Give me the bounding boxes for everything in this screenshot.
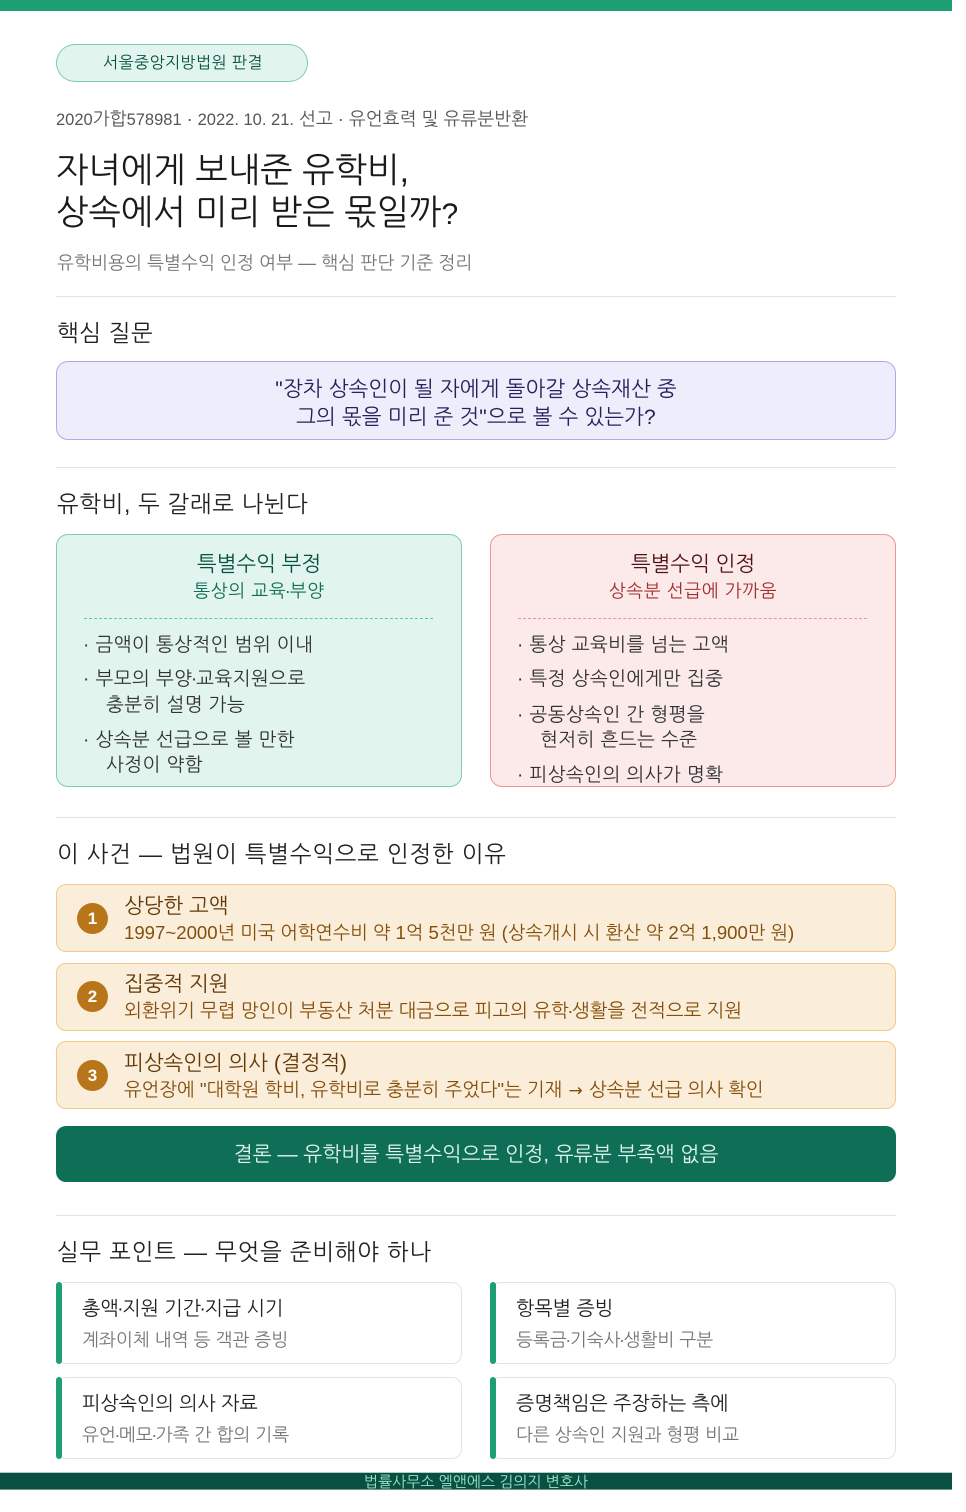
point title: 증명책임은 주장하는 측에 — [516, 1393, 728, 1415]
case meta: 2020가합578981 · 2022. 10. 21. 선고 · 유언효력 및 유류분반환 — [56, 109, 528, 129]
reason 2 — [56, 963, 896, 1031]
reason 3 — [56, 1041, 896, 1109]
number badge: 2 — [88, 987, 97, 1006]
criteria list — [517, 635, 729, 786]
number badge — [77, 981, 108, 1012]
point card 4 — [490, 1377, 896, 1459]
conclusion banner — [56, 1126, 896, 1182]
panel subheading: 상속분 선급에 가까움 — [609, 581, 777, 601]
top bar — [0, 0, 952, 11]
footer — [0, 1472, 952, 1490]
heading: core question: 핵심 질문 — [57, 320, 153, 346]
panel heading: 특별수익 부정 — [197, 553, 321, 576]
reason title: 집중적 지원 — [124, 973, 229, 996]
criteria list — [83, 635, 313, 776]
reason title: 상당한 고액 — [124, 895, 229, 918]
criteria list: · 상속분 선급으로 볼 만한 — [83, 730, 295, 751]
reason detail: 1997~2000년 미국 어학연수비 약 1억 5천만 원 (상속개시 시 환산 약 2억 1,900만 원) — [124, 922, 794, 943]
point title: 항목별 증빙 — [516, 1298, 613, 1320]
reason detail: 외환위기 무렵 망인이 부동산 처분 대금으로 피고의 유학·생활을 전적으로 지원 — [124, 1000, 742, 1021]
subtitle: 유학비용의 특별수익 인정 여부 — 핵심 판단 기준 정리 — [57, 253, 472, 273]
panel heading: 특별수익 인정 — [631, 553, 755, 576]
heading: two kinds: 유학비, 두 갈래로 나뉜다 — [57, 491, 309, 517]
point title: 총액·지원 기간·지급 시기 — [82, 1298, 283, 1320]
panel: core question: "장차 상속인이 될 자에게 돌아갈 상속재산 중 — [275, 378, 677, 401]
point card 3 — [56, 1377, 462, 1459]
reason detail: 유언장에 "대학원 학비, 유학비로 충분히 주었다"는 기재 → 상속분 선급 의사 확인 — [124, 1079, 764, 1101]
point card 1 — [56, 1282, 462, 1364]
title — [56, 152, 458, 232]
reason 1 — [56, 884, 896, 952]
criteria list: · 금액이 통상적인 범위 이내 — [83, 635, 313, 656]
criteria list: 현저히 흔드는 수준 — [540, 730, 697, 751]
number badge: 3 — [88, 1066, 97, 1085]
point detail: 계좌이체 내역 등 객관 증빙 — [82, 1330, 288, 1350]
criteria list: · 부모의 부양·교육지원으로 — [83, 669, 306, 690]
criteria list: · 피상속인의 의사가 명확 — [517, 765, 723, 786]
conclusion banner: 결론 — 유학비를 특별수익으로 인정, 유류분 부족액 없음 — [234, 1144, 718, 1166]
heading: practical points: 실무 포인트 — 무엇을 준비해야 하나 — [57, 1239, 432, 1265]
point card 2 — [490, 1282, 896, 1364]
reason title: 피상속인의 의사 (결정적) — [124, 1052, 347, 1075]
point title: 피상속인의 의사 자료 — [82, 1393, 258, 1415]
panel: not special benefit — [56, 534, 462, 787]
badge: 서울중앙지방법원 판결 — [103, 55, 263, 72]
point detail: 다른 상속인 지원과 형평 비교 — [516, 1425, 739, 1445]
number badge — [77, 1060, 108, 1091]
title: 자녀에게 보내준 유학비, — [56, 152, 409, 190]
title: 상속에서 미리 받은 몫일까? — [56, 194, 458, 232]
criteria list: 사정이 약함 — [106, 755, 203, 776]
criteria list: 충분히 설명 가능 — [106, 695, 245, 716]
heading: reasons: 이 사건 — 법원이 특별수익으로 인정한 이유 — [57, 841, 507, 867]
criteria list: · 통상 교육비를 넘는 고액 — [517, 635, 729, 656]
panel: special benefit — [490, 534, 896, 787]
criteria list: · 특정 상속인에게만 집중 — [517, 669, 723, 690]
panel: core question: 그의 몫을 미리 준 것"으로 볼 수 있는가? — [296, 406, 656, 429]
badge — [56, 44, 308, 82]
criteria list: · 공동상속인 간 형평을 — [517, 705, 705, 726]
panel subheading: 통상의 교육·부양 — [193, 581, 325, 601]
number badge — [77, 903, 108, 934]
panel: core question — [56, 361, 896, 440]
point detail: 등록금·기숙사·생활비 구분 — [516, 1330, 713, 1350]
number badge: 1 — [88, 909, 97, 928]
point detail: 유언·메모·가족 간 합의 기록 — [82, 1425, 289, 1445]
